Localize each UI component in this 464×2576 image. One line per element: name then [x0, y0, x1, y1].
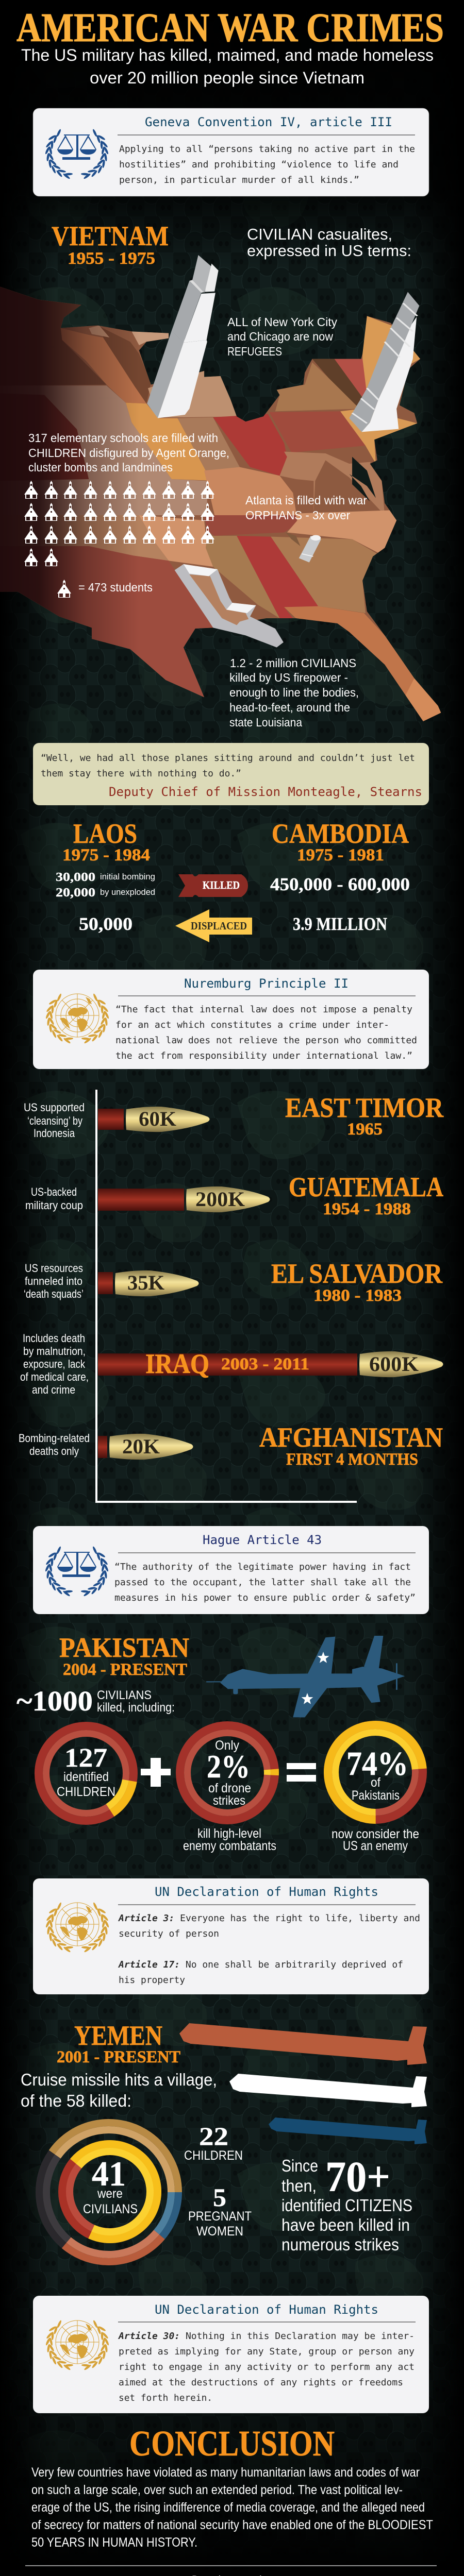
text: refugees: ALL of New York City	[227, 315, 337, 329]
panel text: Article 3: Everyone has the right to life, liberty and	[118, 1913, 420, 1924]
text: cruise missile: of the 58 killed:	[21, 2091, 131, 2110]
text: refugees: and Chicago are now	[227, 330, 333, 343]
subtitle	[21, 46, 434, 87]
icon: drone	[206, 1636, 405, 1717]
label: Iraq note: exposure, lack	[23, 1358, 86, 1370]
label: Guatemala note: military coup	[25, 1199, 83, 1212]
heading: Vietnam: VIETNAM	[52, 221, 169, 251]
label: Afghanistan note: Bombing-related	[19, 1432, 90, 1445]
panel text: set forth herein.	[119, 2393, 212, 2403]
stat: Cambodia killed: 450,000 - 600,000	[270, 874, 410, 894]
quote text	[41, 753, 415, 779]
legend: school equals students: = 473 students	[78, 581, 153, 594]
stat: 5 pregnant women	[188, 2183, 252, 2239]
text: civilians killed: 1.2 - 2 million CIVILIANS	[230, 656, 356, 670]
caption: combatants: kill high-level	[197, 1826, 261, 1841]
heading: Pakistan: PAKISTAN	[59, 1632, 189, 1663]
icon: killed shell	[178, 874, 248, 897]
quote attribution: Deputy Chief of Mission Monteagle, Stearns	[109, 785, 422, 799]
label: Iraq note: by malnutrion,	[23, 1345, 86, 1358]
text: schools: 317 elementary schools are filled with	[28, 431, 218, 445]
ring chart: 127 children: 127	[64, 1743, 107, 1773]
text: civilians killed	[229, 656, 359, 729]
label: El Salvador note	[24, 1262, 84, 1300]
text: cruise missile: Cruise missile hits a village,	[21, 2070, 217, 2089]
text: schools	[28, 431, 229, 474]
panel text: preted as implying for any State, group or person any	[119, 2346, 415, 2357]
heading: Pakistan: 2004 - PRESENT	[63, 1660, 187, 1679]
ring chart: 2 percent of drone strikes: Only	[215, 1738, 239, 1753]
text: civilian casualties heading: CIVILIAN casualites,	[247, 225, 392, 243]
bar: El Salvador 35K: 35K	[127, 1271, 164, 1294]
panel text	[119, 144, 415, 185]
stats: Laos killed: initial bombing	[100, 872, 155, 882]
panel text: passed to the occupant, the latter shall take all the	[114, 1577, 411, 1588]
ring chart: 74 percent of Pakistanis: Pakistanis	[352, 1788, 400, 1803]
panel text	[118, 2331, 415, 2403]
text: orphans: Atlanta is filled with war	[245, 494, 367, 507]
ring chart: 2 percent of drone strikes	[177, 1722, 278, 1823]
label: Guatemala note	[25, 1185, 83, 1212]
heading: Laos: 1975 - 1984	[62, 846, 150, 865]
label: East Timor note: US supported	[24, 1101, 85, 1114]
panel: Nuremberg Principle	[33, 970, 429, 1069]
icon: scales of justice laurel	[45, 1546, 109, 1597]
heading: Afghanistan: AFGHANISTAN	[259, 1422, 443, 1453]
text: civilians killed: state Louisiana	[229, 716, 302, 729]
symbol: plus	[141, 1758, 171, 1787]
panel text	[114, 1562, 416, 1603]
label: El Salvador note: ‘death squads’	[24, 1287, 84, 1300]
panel text: security of person	[119, 1928, 219, 1939]
panel text: for an act which constitutes a crime under inter-	[115, 1020, 389, 1030]
heading: Vietnam: 1955 - 1975	[68, 249, 155, 268]
caption: enemy	[332, 1827, 419, 1853]
heading: Vietnam	[52, 221, 169, 268]
text: civilian casualties heading: expressed in US terms:	[247, 242, 411, 260]
bar: East Timor 60K	[98, 1107, 209, 1132]
arrow: displaced	[175, 909, 252, 942]
stat: 5 pregnant women: PREGNANT	[188, 2209, 252, 2224]
stat: 70+ citizens: have been killed in	[281, 2215, 410, 2234]
ring chart: 2 percent of drone strikes: strikes	[213, 1793, 245, 1808]
stat: 70+ citizens: then,	[281, 2176, 317, 2195]
bar: Iraq 600K	[98, 1348, 443, 1379]
heading: Pakistan	[59, 1632, 189, 1679]
heading: East Timor	[285, 1092, 444, 1139]
panel text: national law does not relieve the person who committed	[115, 1035, 417, 1046]
stat: 5 pregnant women: 5	[213, 2183, 226, 2212]
text: orphans: ORPHANS - 3x over	[245, 509, 350, 522]
stat: about 1000 civilians: killed, including:	[97, 1701, 175, 1715]
text: civilians killed: enough to line the bodies,	[229, 686, 359, 699]
icon: UN emblem	[45, 2320, 109, 2371]
heading: El Salvador	[271, 1258, 443, 1305]
heading: Yemen	[57, 2020, 180, 2066]
quote text: them stay there with nothing to do.”	[41, 768, 241, 779]
pictogram: school icons	[24, 481, 214, 566]
label: Afghanistan note: deaths only	[29, 1445, 79, 1458]
label: Afghanistan note	[19, 1432, 90, 1458]
icon: scales of justice laurel	[45, 129, 109, 180]
heading: Cambodia: CAMBODIA	[272, 818, 409, 849]
chart: bullet bar chart of deaths	[96, 1090, 443, 1502]
panel text: Article 17: No one shall be arbitrarily deprived of	[118, 1959, 403, 1970]
stat: 5 pregnant women: WOMEN	[196, 2224, 243, 2239]
caption: combatants	[183, 1826, 276, 1853]
caption: combatants: enemy combatants	[183, 1839, 276, 1853]
heading: El Salvador: EL SALVADOR	[271, 1258, 443, 1289]
panel text: his property	[119, 1975, 185, 1986]
bar: Guatemala 200K: 200K	[195, 1188, 245, 1211]
stat: Laos displaced: 50,000	[79, 914, 132, 934]
stat: 70+ citizens: 70+	[325, 2153, 390, 2201]
stats: Laos killed: by unexploded	[100, 887, 155, 897]
panel text	[115, 1004, 417, 1061]
heading: East Timor: EAST TIMOR	[285, 1092, 444, 1123]
ring chart: 74 percent of Pakistanis: of	[371, 1775, 380, 1790]
quote text: “Well, we had all those planes sitting around and couldn’t just let	[41, 753, 415, 764]
panel: Hague Article 43	[33, 1526, 429, 1614]
icon: orange cruise missile	[179, 2023, 427, 2065]
text: conclusion paragraph: on such a large scale, over such an extended period. The vast political lev-	[31, 2483, 403, 2497]
icon: skyscraper two	[349, 292, 419, 432]
text: conclusion paragraph: 50 YEARS IN HUMAN HISTORY.	[31, 2535, 197, 2550]
bar: Iraq 600K: 600K	[369, 1352, 419, 1376]
text: civilians killed: head-to-feet, around the	[229, 701, 350, 714]
donut chart: village casualties	[11, 2094, 207, 2290]
panel heading: UN Declaration of Human Rights	[155, 2302, 378, 2317]
icon: blue cruise missile	[269, 2117, 427, 2144]
ring chart: 2 percent of drone strikes: of drone	[208, 1781, 251, 1795]
heading: Cambodia	[272, 818, 409, 865]
bar: Afghanistan 20K	[98, 1434, 193, 1460]
label: Iraq note: of medical care,	[20, 1370, 89, 1383]
donut chart: village casualties: were	[97, 2187, 123, 2201]
ring chart: 74 percent of Pakistanis: 74%	[346, 1745, 408, 1783]
panel heading: UN Declaration of Human Rights	[155, 1885, 378, 1899]
stat: Cambodia displaced: 3.9 MILLION	[293, 914, 387, 934]
text: refugees	[227, 315, 337, 358]
stat: 22 children: 22	[199, 2122, 228, 2150]
panel text: Article 30: Nothing in this Declaration may be inter-	[118, 2331, 415, 2342]
donut chart: village casualties: CIVILIANS	[83, 2202, 138, 2216]
label: East Timor note: Indonesia	[34, 1127, 75, 1140]
arrow: displaced: DISPLACED	[191, 920, 247, 932]
panel text: measures in his power to ensure public order & safety”	[114, 1592, 416, 1603]
icon: UN emblem	[45, 993, 109, 1044]
panel heading: Hague Article 43	[203, 1533, 322, 1547]
subtitle: The US military has killed, maimed, and made homeless	[21, 46, 434, 64]
text: conclusion paragraph	[31, 2465, 433, 2550]
ring chart: 127 children	[31, 1718, 141, 1828]
panel: quote	[33, 743, 429, 805]
icon: skyscraper one	[147, 255, 219, 418]
panel: UN Declaration article 30	[33, 2296, 429, 2413]
stat: about 1000 civilians	[16, 1685, 175, 1717]
donut chart: village casualties: 41	[92, 2154, 126, 2193]
icon: Atlanta cylinder	[299, 535, 321, 563]
panel: Geneva Convention	[33, 108, 429, 196]
caption: enemy: US an enemy	[343, 1839, 408, 1853]
stat: 70+ citizens: identified CITIZENS	[281, 2196, 412, 2215]
heading: Laos	[62, 818, 150, 865]
stats: Laos killed: 30,000	[56, 871, 95, 884]
bar: El Salvador 35K	[98, 1270, 199, 1296]
text: schools: cluster bombs and landmines	[28, 461, 173, 474]
stat: 22 children	[184, 2122, 243, 2163]
ring chart: 127 children: identified	[63, 1770, 109, 1784]
bar: Guatemala 200K	[98, 1187, 270, 1212]
label: Guatemala note: US-backed	[31, 1185, 77, 1198]
icon: white cruise missile	[229, 2074, 427, 2107]
text: schools: CHILDREN disfigured by Agent Orange,	[28, 446, 229, 460]
ring chart: 127 children: CHILDREN	[57, 1785, 115, 1799]
panel heading: Nuremburg Principle II	[184, 976, 349, 991]
icon: killed shell: KILLED	[203, 879, 240, 891]
label: Iraq note: Includes death	[23, 1332, 85, 1345]
heading: Laos: LAOS	[73, 818, 137, 849]
panel text	[118, 1913, 420, 1986]
panel: UN Declaration articles 3 and 17	[33, 1878, 429, 1994]
bar: Afghanistan 20K: 20K	[122, 1435, 160, 1458]
heading: East Timor: 1965	[347, 1120, 383, 1139]
bar: Iraq 600K: IRAQ	[145, 1348, 209, 1379]
panel text: Applying to all “persons taking no active part in the	[119, 144, 415, 155]
chart axes	[96, 1090, 357, 1502]
heading: Yemen: 2001 - PRESENT	[57, 2048, 180, 2066]
text: civilian casualties heading	[247, 225, 411, 260]
panel text: aimed at the destructions of any rights or freedoms	[119, 2377, 403, 2388]
panel text: right to engage in any activity or to perform any act	[119, 2362, 415, 2372]
stat: about 1000 civilians: CIVILIANS	[97, 1688, 152, 1702]
panel heading: Geneva Convention IV, article III	[145, 115, 392, 129]
stat: 22 children: CHILDREN	[184, 2148, 243, 2163]
panel text: hostilities” and prohibiting “violence to life and	[119, 159, 399, 170]
heading: Cambodia: 1975 - 1981	[297, 846, 384, 865]
heading: Afghanistan: FIRST 4 MONTHS	[286, 1450, 418, 1469]
label: East Timor note	[24, 1101, 85, 1140]
map: United States with buildings	[0, 255, 464, 738]
bar: East Timor 60K: 60K	[139, 1107, 176, 1130]
panel text: “The fact that internal law does not impose a penalty	[115, 1004, 412, 1015]
bar: Iraq 600K: 2003 - 2011	[221, 1355, 309, 1374]
text: cruise missile	[21, 2070, 217, 2110]
stat: 70+ citizens: numerous strikes	[281, 2235, 399, 2254]
stat: about 1000 civilians: ~1000	[16, 1685, 93, 1717]
label: El Salvador note: US resources	[25, 1262, 83, 1275]
stats: Laos killed: 20,000	[56, 886, 95, 900]
heading: Guatemala	[289, 1172, 443, 1218]
panel text: the act from responsibility under international law.”	[115, 1050, 412, 1061]
stats: Laos killed	[56, 871, 155, 900]
heading: conclusion: CONCLUSION	[129, 2424, 335, 2464]
label: El Salvador note: funneled into	[25, 1275, 82, 1287]
symbol: equals	[287, 1763, 316, 1782]
text: orphans	[245, 494, 367, 522]
icon: UN emblem	[45, 1902, 109, 1953]
panel text: person, in particular murder of all kinds.”	[119, 175, 359, 185]
subtitle: over 20 million people since Vietnam	[90, 69, 364, 87]
label: Iraq note	[20, 1332, 89, 1396]
text: civilians killed: killed by US firepower -	[229, 671, 348, 684]
label: East Timor note: ‘cleansing’ by	[27, 1114, 82, 1127]
heading: El Salvador: 1980 - 1983	[313, 1286, 402, 1305]
stat: 70+ citizens	[281, 2153, 412, 2254]
caption: enemy: now consider the	[332, 1827, 419, 1841]
panel text: “The authority of the legitimate power having in fact	[114, 1562, 411, 1572]
heading: Guatemala: 1954 - 1988	[323, 1200, 411, 1218]
ring chart: 74 percent of Pakistanis	[328, 1725, 423, 1820]
heading: Afghanistan	[259, 1422, 443, 1469]
text: refugees: REFUGEES	[227, 345, 282, 358]
heading: Yemen: YEMEN	[74, 2020, 162, 2051]
stat: 70+ citizens: Since	[281, 2156, 318, 2175]
legend: school equals students	[57, 580, 153, 598]
label: Iraq note: and crime	[32, 1383, 75, 1396]
ring chart: 2 percent of drone strikes: 2%	[207, 1748, 250, 1785]
icon: Louisiana outline	[175, 564, 284, 648]
